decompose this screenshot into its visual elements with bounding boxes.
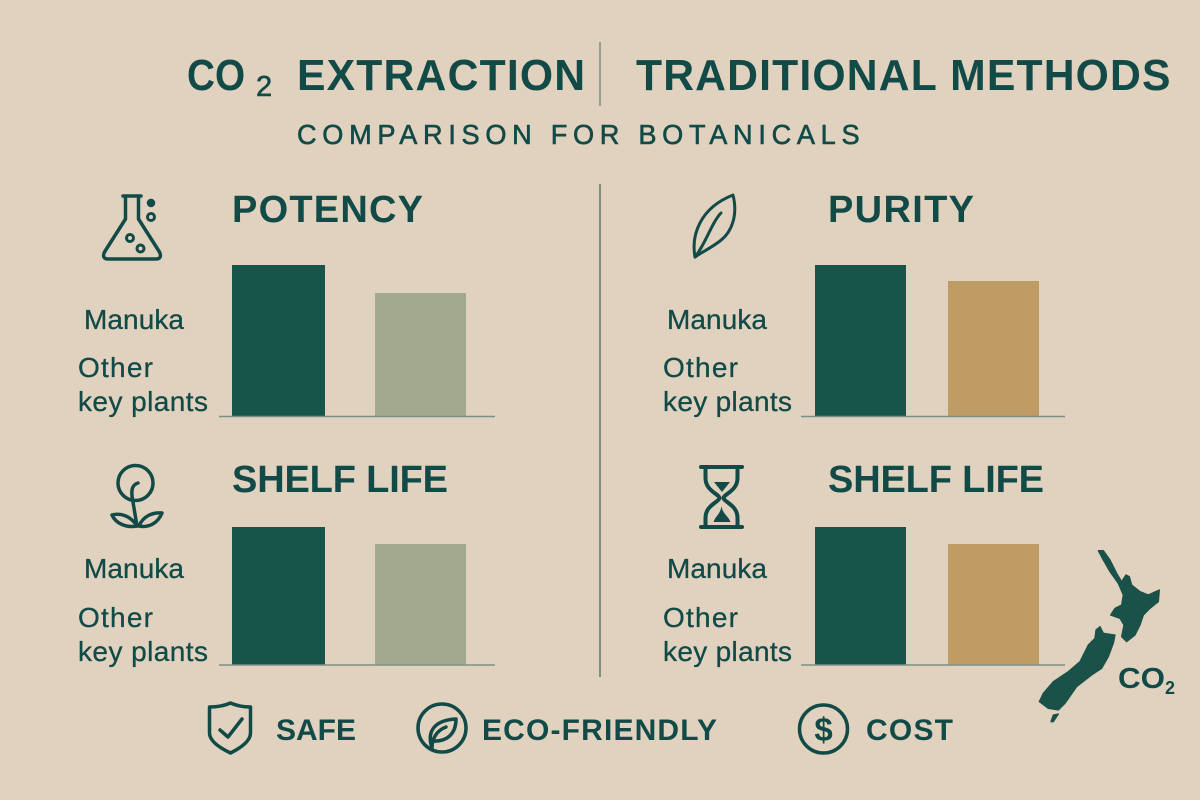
bar chart xyxy=(219,527,495,665)
title: CO2 extraction: 2 xyxy=(256,71,272,103)
icon: dollar coin: $ xyxy=(814,711,833,748)
title: traditional methods: TRADITIONAL METHODS xyxy=(636,51,1170,100)
labels: Manuka xyxy=(84,553,184,584)
title: CO2 extraction: CO xyxy=(187,50,245,100)
title: CO2 extraction: EXTRACTION xyxy=(297,51,585,100)
label: CO2: CO xyxy=(1118,663,1165,695)
labels xyxy=(78,553,208,667)
labels: Other xyxy=(78,602,153,633)
icon: shield xyxy=(210,703,250,753)
heading: SHELF LIFE xyxy=(232,459,448,501)
bar chart xyxy=(801,265,1065,416)
panel: purity xyxy=(663,189,1065,417)
labels xyxy=(663,304,792,417)
feature: eco-friendly xyxy=(418,704,717,752)
bar chart xyxy=(801,527,1065,665)
labels xyxy=(663,553,792,667)
icon: leaf in circle xyxy=(418,704,466,752)
heading: SHELF LIFE xyxy=(828,459,1044,501)
bar chart xyxy=(219,265,495,416)
icon: leaf xyxy=(694,195,735,257)
icon: flask xyxy=(104,196,160,259)
heading: POTENCY xyxy=(232,189,423,231)
labels: key plants xyxy=(663,386,792,417)
label: ECO-FRIENDLY xyxy=(482,714,717,747)
icon: hourglass xyxy=(701,467,742,527)
map: New Zealand xyxy=(1039,551,1159,722)
icon: flower xyxy=(112,466,162,527)
labels: Manuka xyxy=(667,553,767,584)
label: CO2: 2 xyxy=(1165,678,1175,698)
label: CO2 xyxy=(1118,663,1175,698)
labels: Manuka xyxy=(84,304,184,335)
labels xyxy=(78,304,208,417)
title: CO2 extraction xyxy=(187,50,585,103)
panel: shelf life left xyxy=(78,459,495,667)
label: SAFE xyxy=(276,714,356,747)
labels: Manuka xyxy=(667,304,767,335)
labels: key plants xyxy=(78,386,208,417)
feature: cost xyxy=(800,705,953,753)
labels: key plants xyxy=(78,636,208,667)
label: COST xyxy=(866,714,953,747)
subtitle: COMPARISON FOR BOTANICALS xyxy=(297,119,860,150)
heading: PURITY xyxy=(828,189,974,231)
panel: potency xyxy=(78,189,495,417)
icon: dollar coin xyxy=(800,705,848,753)
feature: safe xyxy=(210,703,356,753)
labels: Other xyxy=(663,602,738,633)
labels: Other xyxy=(78,352,153,383)
panel: shelf life right xyxy=(663,459,1065,667)
labels: Other xyxy=(663,352,738,383)
labels: key plants xyxy=(663,636,792,667)
